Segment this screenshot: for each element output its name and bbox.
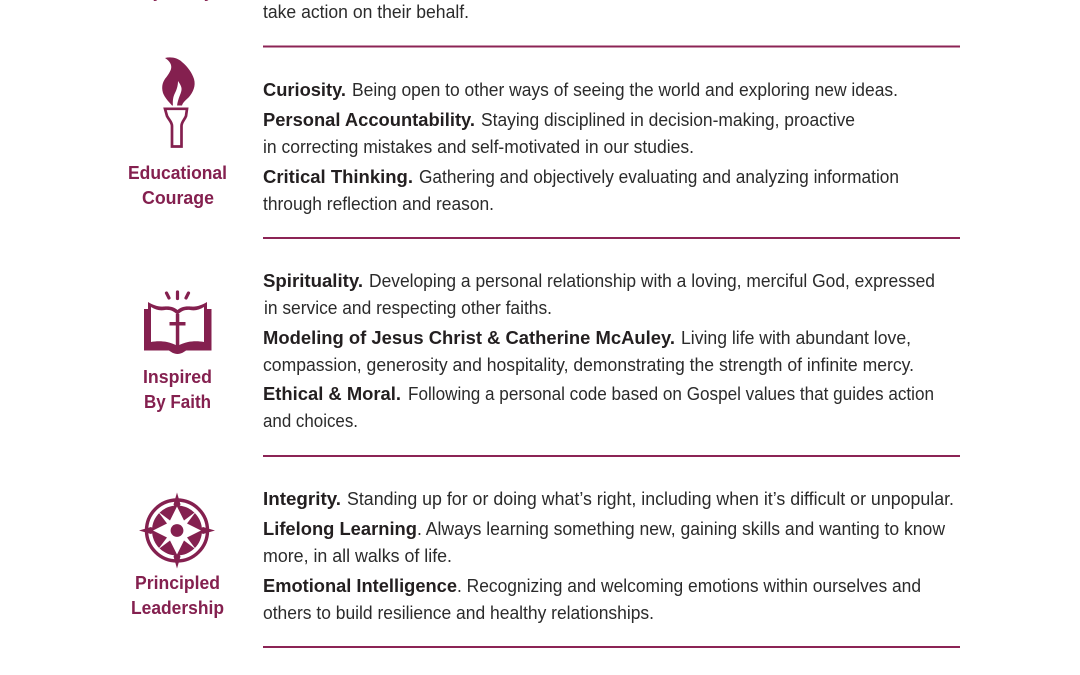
text: ethical and moral: and choices. — [263, 411, 358, 431]
text: critical thinking: through reflection and reason. — [263, 194, 494, 214]
panel: educational courage — [128, 57, 899, 214]
panel: principled leadership — [131, 488, 954, 623]
label: educational courage: Educational — [128, 162, 227, 183]
panel: inspired by faith — [143, 270, 935, 431]
text: spirituality — [263, 270, 935, 318]
text: modeling: Modeling of Jesus Christ & Catherine McAuley. — [263, 327, 675, 348]
label: principled leadership — [131, 572, 224, 618]
text: ethical and moral — [263, 383, 934, 431]
text: lifelong learning: . Always learning something new, gaining skills and wanting to know — [417, 519, 946, 539]
label: inspired by faith: By Faith — [144, 391, 211, 412]
text: personal accountability — [263, 109, 855, 157]
text: lifelong learning — [263, 518, 946, 566]
text: spirituality: in service and respecting other faiths. — [264, 298, 552, 318]
icon: torch — [162, 57, 195, 147]
text: curiosity: Curiosity. — [263, 79, 346, 100]
text: integrity: Integrity. — [263, 488, 341, 509]
text: personal accountability: Personal Accountability. — [263, 109, 475, 130]
text: lifelong learning: Lifelong Learning — [263, 518, 417, 539]
text: critical thinking: Critical Thinking. — [263, 166, 413, 187]
text: emotional intelligence: others to build resilience and healthy relationships. — [263, 603, 654, 623]
text: personal accountability: in correcting mistakes and self-motivated in our studies. — [263, 137, 694, 157]
label: inspired by faith: Inspired — [143, 366, 212, 387]
text: critical thinking — [263, 166, 899, 214]
text: emotional intelligence: . Recognizing and welcoming emotions within ourselves and — [457, 576, 921, 596]
text: modeling: compassion, generosity and hospitality, demonstrating the strength of infinite mercy. — [263, 355, 914, 375]
label: educational courage — [128, 162, 227, 208]
label: principled leadership: Leadership — [131, 597, 224, 618]
label: educational courage: Courage — [142, 187, 214, 208]
label: inspired by faith — [143, 366, 212, 412]
text: spirituality: Spirituality. — [263, 270, 363, 291]
text: personal accountability: Staying disciplined in decision-making, proactive — [481, 110, 855, 130]
text: critical thinking: Gathering and objectively evaluating and analyzing information — [419, 167, 899, 187]
text: lifelong learning: more, in all walks of life. — [263, 546, 452, 566]
text: ethical and moral: Ethical & Moral. — [263, 383, 401, 404]
label: principled leadership: Principled — [135, 572, 220, 593]
text: ethical and moral: Following a personal code based on Gospel values that guides action — [408, 384, 934, 404]
text block: end of first value: take action on their behalf. — [263, 2, 469, 22]
text: modeling — [263, 327, 914, 375]
text: integrity: Standing up for or doing what’s right, including when it’s difficult or unpopular. — [347, 489, 954, 509]
text: curiosity: Being open to other ways of seeing the world and exploring new ideas. — [352, 80, 898, 100]
icon: compass — [139, 492, 215, 568]
icon: open book with cross — [144, 292, 212, 354]
text: spirituality: Developing a personal relationship with a loving, merciful God, expressed — [369, 271, 935, 291]
text: emotional intelligence — [263, 575, 921, 623]
text: modeling: Living life with abundant love, — [681, 328, 911, 348]
text: emotional intelligence: Emotional Intelligence — [263, 575, 457, 596]
